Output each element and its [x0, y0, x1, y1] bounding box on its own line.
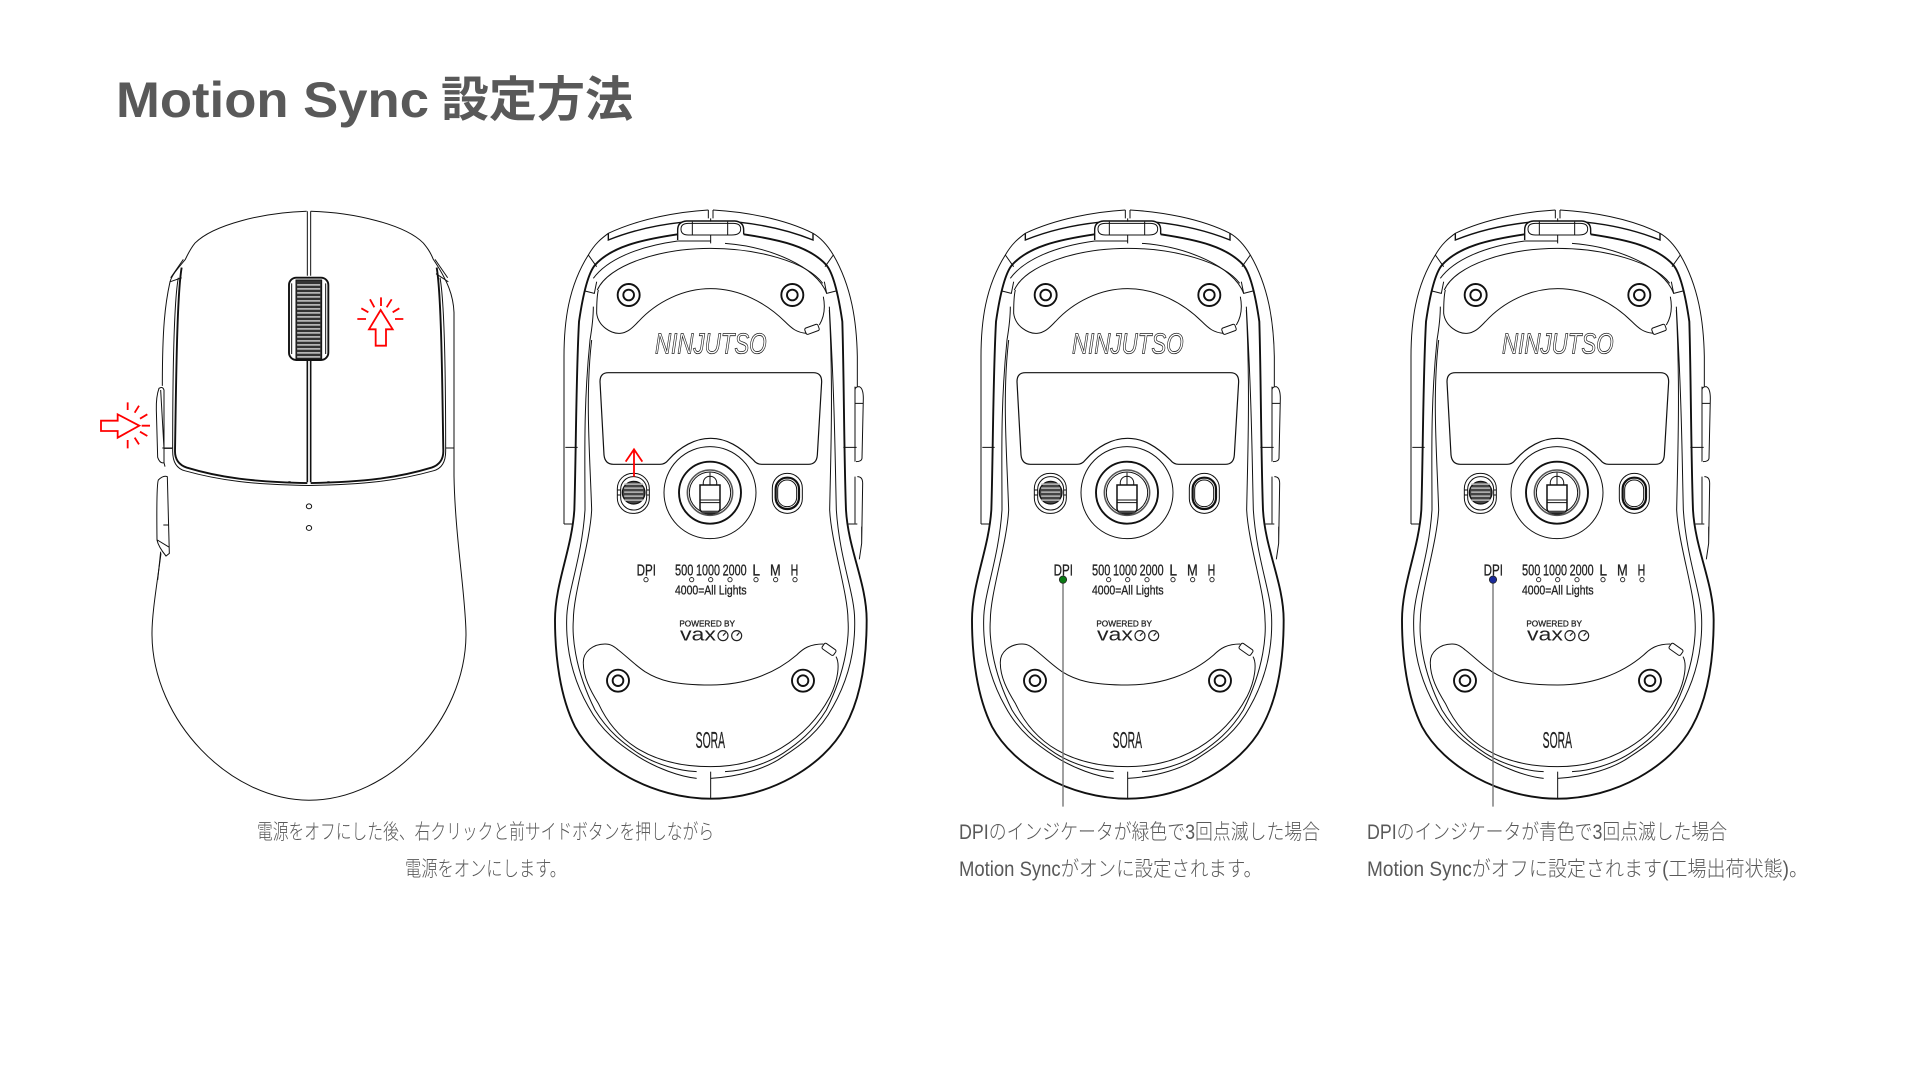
dpi labels [637, 563, 798, 753]
side buttons [156, 387, 172, 580]
red click arrow: right button [357, 297, 403, 346]
red arrow: switch [626, 449, 642, 477]
vaxee logo: vax [1097, 624, 1134, 645]
dpi labels: 2000 [1140, 563, 1164, 580]
green led [1059, 576, 1067, 583]
dpi labels: POWERED BY [679, 619, 735, 629]
caption: blue: Motion Syncがオフに設定されます(工場出荷状態)。 [1367, 858, 1808, 881]
dpi labels: 4000=All Lights [1522, 582, 1594, 597]
caption: blue: DPIのインジケータが青色で3回点滅した場合 [1367, 821, 1727, 844]
caption: step 1: 電源をオンにします。 [405, 858, 566, 881]
dpi labels [1484, 563, 1645, 753]
blue led [1489, 576, 1497, 583]
caption: green: DPIのインジケータが緑色で3回点滅した場合 [959, 821, 1320, 844]
title: Motion Sync [116, 72, 429, 128]
vaxee logo: vax [1527, 624, 1564, 645]
leader line [1492, 582, 1494, 807]
dpi labels: DPI [637, 563, 656, 580]
body outline [152, 211, 466, 800]
dpi labels: 4000=All Lights [675, 582, 747, 597]
caption: step 1 [257, 821, 714, 881]
mouse bottom view: motion sync on [972, 210, 1284, 807]
vaxee logo: vax [680, 624, 717, 645]
dpi labels: 2000 [723, 563, 747, 580]
dpi labels: H [1208, 563, 1215, 580]
dpi labels: H [791, 563, 798, 580]
caption: blue [1367, 821, 1808, 881]
dpi labels: 500 [1092, 563, 1110, 580]
dpi labels [1054, 563, 1215, 753]
title [116, 72, 633, 128]
dpi labels: SORA [1113, 727, 1142, 753]
dpi labels: L [1169, 563, 1177, 580]
dpi labels: 2000 [1570, 563, 1594, 580]
caption: step 1: 電源をオフにした後、右クリックと前サイドボタンを押しながら [257, 821, 714, 844]
red click arrow: side button [101, 402, 150, 448]
dpi labels: M [1617, 563, 1628, 580]
dpi labels: H [1638, 563, 1645, 580]
leader line [1062, 582, 1064, 807]
scroll wheel [289, 278, 328, 360]
dpi labels: M [770, 563, 781, 580]
caption: green [959, 821, 1320, 881]
logo: NINJUTSO [1072, 329, 1184, 361]
mouse top view [101, 211, 466, 800]
dpi labels: L [752, 563, 760, 580]
dpi labels: 1000 [1543, 563, 1567, 580]
dpi labels: 500 [1522, 563, 1540, 580]
dpi labels: DPI [1484, 563, 1503, 580]
mouse bottom view: step 1 [555, 210, 867, 799]
dpi labels: 1000 [696, 563, 720, 580]
logo: NINJUTSO [655, 329, 767, 361]
dpi labels: 500 [675, 563, 693, 580]
button inner seams [162, 211, 454, 486]
logo: NINJUTSO [1502, 329, 1614, 361]
dpi labels: L [1599, 563, 1607, 580]
dpi labels: 1000 [1113, 563, 1137, 580]
dpi labels: POWERED BY [1526, 619, 1582, 629]
status leds [306, 504, 312, 530]
dpi labels: DPI [1054, 563, 1073, 580]
caption: green: Motion Syncがオンに設定されます。 [959, 858, 1262, 881]
dpi labels: SORA [696, 727, 725, 753]
mouse bottom view: motion sync off [1402, 210, 1714, 807]
dpi labels: POWERED BY [1096, 619, 1152, 629]
title: 設定方法 [441, 74, 633, 127]
dpi labels: M [1187, 563, 1198, 580]
dpi labels: 4000=All Lights [1092, 582, 1164, 597]
dpi labels: SORA [1543, 727, 1572, 753]
